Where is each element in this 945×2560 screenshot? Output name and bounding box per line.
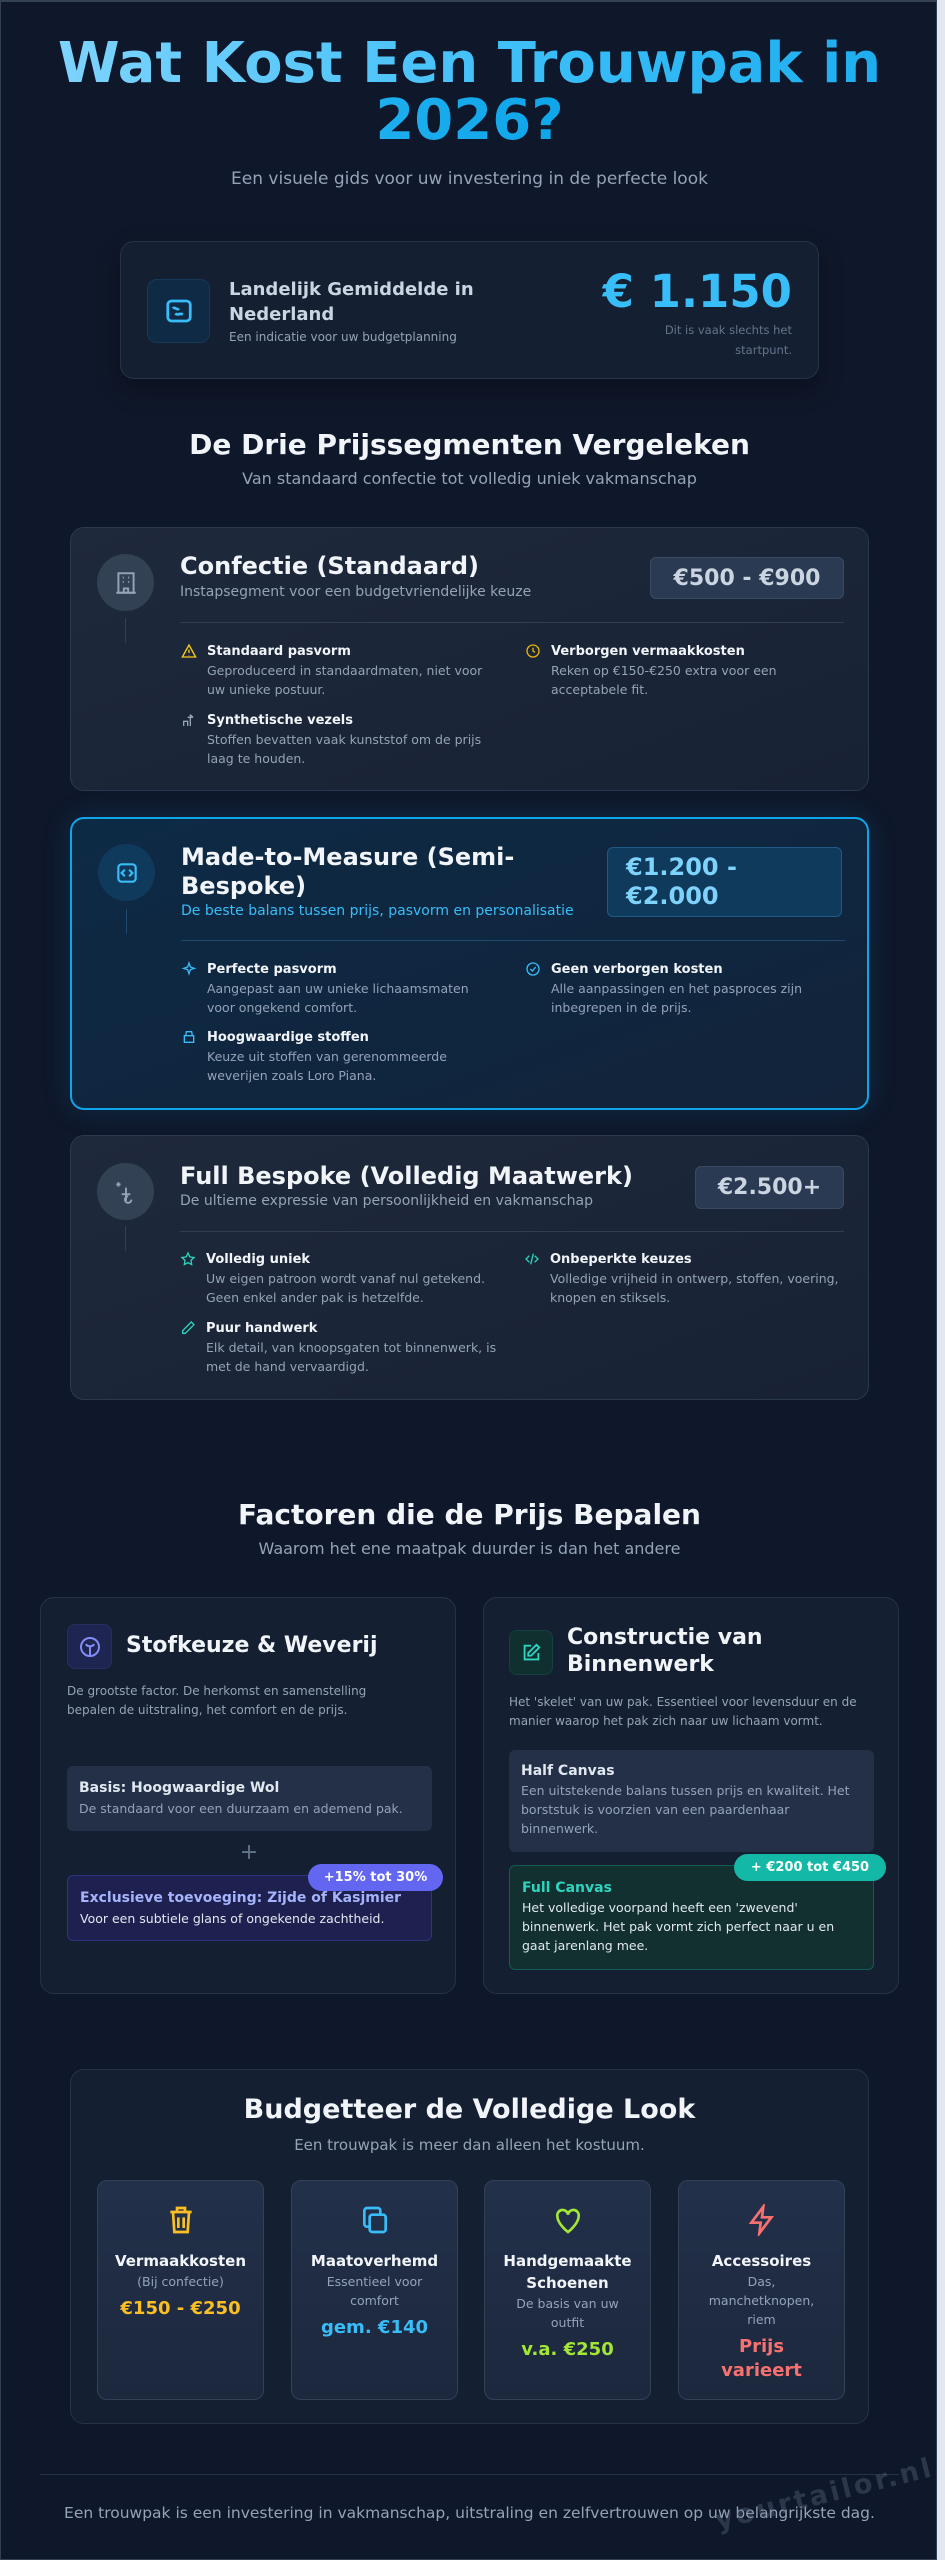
average price: startpunt. [735,343,792,357]
feature: verborgen vermaakkosten [526,644,777,697]
panel: made-to-measure [70,817,869,1110]
item: vermaakkosten [97,2180,264,2400]
price badge: €500 - €900 [674,566,820,590]
feature: geen verborgen kosten [526,962,802,1015]
section subtitle: Waarom het ene maatpak duurder is dan het andere [259,1539,680,1558]
item: vermaakkosten: Vermaakkosten [115,2252,246,2270]
panel: budget [70,2069,869,2424]
item: accessoires: varieert [721,2360,802,2381]
item: maatoverhemd: comfort [350,2293,399,2308]
item: maatoverhemd: Maatoverhemd [311,2252,438,2270]
subheading: Een trouwpak is meer dan alleen het kostuum. [294,2136,645,2154]
feature: perfecte pasvorm [182,961,469,1015]
option: basis wol [67,1766,432,1831]
option: full canvas [509,1865,874,1970]
feature: puur handwerk: Elk detail, van knoopsgaten tot binnenwerk, is [206,1340,496,1355]
average label: Een indicatie voor uw budgetplanning [229,330,457,344]
item: schoenen: De basis van uw [516,2296,619,2311]
feature: onbeperkte keuzes: Volledige vrijheid in ontwerp, stoffen, voering, [550,1271,839,1286]
feature: puur handwerk [182,1321,496,1374]
item: accessoires [678,2180,845,2400]
badge: +15% tot 30%: +15% tot 30% [324,1870,427,1885]
feature: onbeperkte keuzes: knopen en stiksels. [550,1290,670,1305]
title: Wat Kost Een Trouwpak in [58,31,881,96]
feature: perfecte pasvorm: Aangepast aan uw unieke lichaamsmaten [207,981,469,996]
feature: standaard pasvorm: Geproduceerd in standaardmaten, niet voor [207,663,482,678]
section subtitle: Van standaard confectie tot volledig uniek vakmanschap [242,469,697,488]
feature: synthetische vezels: Stoffen bevatten vaak kunststof om de prijs [207,732,481,747]
item: accessoires: Prijs [739,2336,784,2357]
item: accessoires: riem [747,2312,776,2327]
item: schoenen [484,2180,651,2400]
description: bepalen de uitstraling, het comfort en de prijs. [67,1703,347,1717]
panel: confectie [70,527,869,791]
item: schoenen: outfit [551,2315,584,2330]
watermark: yourtailor.nl [712,2452,937,2537]
average label: Landelijk Gemiddelde in Nederland [229,279,474,325]
option: zijde of kasjmier: Voor een subtiele glans of ongekende zachtheid. [80,1911,384,1926]
item: schoenen: v.a. €250 [521,2339,614,2360]
option: half canvas: Een uitstekende balans tussen prijs en kwaliteit. Het [521,1783,850,1798]
feature: synthetische vezels: Synthetische vezels [207,713,353,728]
average price: € 1.150 [603,265,792,318]
feature: geen verborgen kosten: Alle aanpassingen en het pasproces zijn [551,981,802,996]
panel: stofkeuze [40,1597,456,1994]
feature: hoogwaardige stoffen: Keuze uit stoffen van gerenommeerde [207,1049,447,1064]
subheading: De ultieme expressie van persoonlijkheid en vakmanschap [180,1193,593,1209]
heading: Full Bespoke (Volledig Maatwerk) [180,1162,633,1190]
feature: hoogwaardige stoffen: Hoogwaardige stoffen [207,1030,369,1045]
item: maatoverhemd: Essentieel voor [327,2274,422,2289]
feature: hoogwaardige stoffen: weverijen zoals Loro Piana. [207,1068,376,1083]
feature: onbeperkte keuzes: Onbeperkte keuzes [550,1252,692,1267]
option: half canvas: Half Canvas [521,1763,615,1779]
icon: tools [97,1163,154,1220]
title [58,31,881,153]
heading: Bespoke) [181,872,306,900]
option: full canvas: binnenwerk. Het pak vormt zich perfect naar u en [522,1919,834,1934]
feature: geen verborgen kosten: Geen verborgen kosten [551,962,723,977]
panel: constructie [483,1597,899,1994]
heading: Binnenwerk [567,1652,714,1677]
badge: +200 tot 450 [734,1854,886,1881]
icon: fabric [67,1624,112,1669]
option: basis wol: Basis: Hoogwaardige Wol [79,1780,279,1796]
icon: building [97,554,154,611]
feature: standaard pasvorm [181,644,482,697]
title: 2026? [375,88,564,153]
section heading: factors: Factoren die de Prijs Bepalen [238,1498,701,1531]
feature: hoogwaardige stoffen [184,1030,447,1083]
description: De grootste factor. De herkomst en samenstelling [67,1684,366,1698]
description [509,1695,857,1728]
feature: verborgen vermaakkosten: Verborgen vermaakkosten [551,644,745,659]
panel: full bespoke [70,1135,869,1400]
item: accessoires: manchetknopen, [709,2293,814,2308]
description [67,1684,366,1717]
average price: Dit is vaak slechts het [665,323,792,337]
icon: code square [98,844,155,901]
average price card [120,241,819,379]
option: zijde of kasjmier [67,1875,432,1941]
option: full canvas: Full Canvas [522,1880,612,1896]
item: schoenen: Schoenen [526,2274,609,2292]
feature: volledig uniek: Volledig uniek [206,1252,310,1267]
item: vermaakkosten: (Bij confectie) [137,2274,224,2289]
option: full canvas: Het volledige voorpand heeft een 'zwevend' [522,1900,798,1915]
price badge: €1.200 - [626,853,737,881]
item: schoenen: Handgemaakte [503,2252,632,2270]
heading: Made-to-Measure (Semi- [181,843,514,871]
heading [567,1625,763,1677]
badge: +15% tot 30% [308,1864,443,1891]
feature: volledig uniek [180,1252,485,1305]
badge: +200 tot 450: + €200 tot €450 [751,1860,869,1875]
option: half canvas: binnenwerk. [521,1821,598,1836]
option: zijde of kasjmier: Exclusieve toevoeging: Zijde of Kasjmier [80,1890,401,1906]
feature: standaard pasvorm: Standaard pasvorm [207,644,351,659]
option: half canvas: borststuk is voorzien van een paardenhaar [521,1802,789,1817]
icon: edit [509,1630,553,1675]
option: half canvas [509,1750,874,1852]
heading: Stofkeuze & Weverij [126,1633,378,1658]
description: manier waarop het pak zich naar uw lichaam vormt. [509,1714,823,1728]
item: maatoverhemd: gem. €140 [321,2317,428,2338]
feature: verborgen vermaakkosten: acceptabele fit. [551,682,648,697]
heading [181,843,514,900]
footer text: Een trouwpak is een investering in vakmanschap, uitstraling en zelfvertrouwen op uw belangrijkste dag. [64,2504,875,2522]
option: full canvas: gaat jarenlang mee. [522,1938,648,1953]
feature: verborgen vermaakkosten: Reken op €150-€250 extra voor een [551,663,777,678]
subheading: Instapsegment voor een budgetvriendelijke keuze [180,584,531,600]
item: accessoires: Das, [748,2274,775,2289]
feature: perfecte pasvorm: Perfecte pasvorm [207,962,337,977]
price badge [650,557,844,599]
feature: geen verborgen kosten: inbegrepen in de prijs. [551,1000,692,1015]
subheading: De beste balans tussen prijs, pasvorm en personalisatie [181,903,574,919]
description: Het 'skelet' van uw pak. Essentieel voor levensduur en de [509,1695,857,1709]
feature: puur handwerk: Puur handwerk [206,1321,317,1336]
feature: synthetische vezels: laag te houden. [207,751,305,766]
feature: synthetische vezels [183,713,481,766]
feature: puur handwerk: met de hand vervaardigd. [206,1359,369,1374]
price badge [607,847,842,917]
feature: onbeperkte keuzes [525,1252,839,1305]
plus sign: + [240,1840,258,1865]
icon: banknote [147,279,210,343]
feature: volledig uniek: Uw eigen patroon wordt vanaf nul getekend. [206,1271,485,1286]
heading: Constructie van [567,1625,763,1650]
feature: volledig uniek: Geen enkel ander pak is hetzelfde. [206,1290,424,1305]
section heading: segments: De Drie Prijssegmenten Vergeleken [189,428,750,461]
item: maatoverhemd [291,2180,458,2400]
price badge [695,1166,844,1209]
average price [602,265,792,357]
heading: Confectie (Standaard) [180,552,479,580]
option: basis wol: De standaard voor een duurzaam en ademend pak. [79,1801,403,1816]
heading: Budgetteer de Volledige Look [244,2094,695,2125]
item: accessoires: Accessoires [712,2252,811,2270]
price badge: €2.500+ [718,1175,821,1200]
feature: perfecte pasvorm: voor ongekend comfort. [207,1000,357,1015]
feature: standaard pasvorm: uw unieke postuur. [207,682,325,697]
item: vermaakkosten: €150 - €250 [120,2298,241,2319]
subtitle: Een visuele gids voor uw investering in de perfecte look [231,169,708,189]
price badge: €2.000 [626,882,719,910]
